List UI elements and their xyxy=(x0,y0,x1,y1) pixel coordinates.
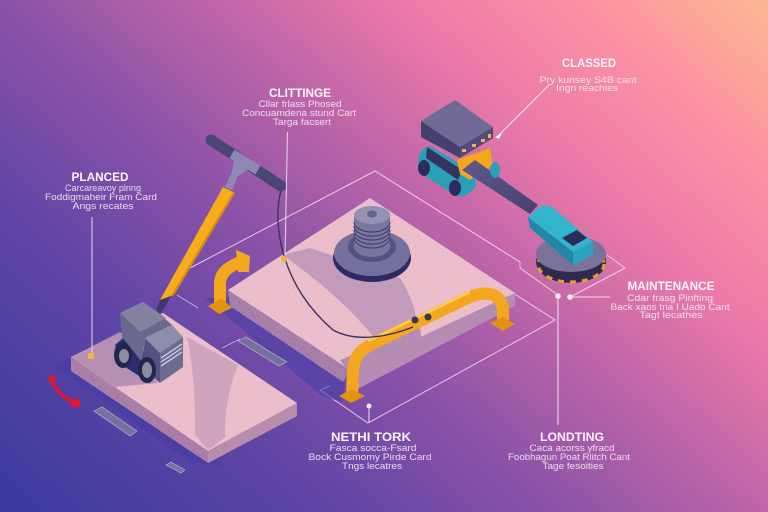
icon: flanged spool xyxy=(333,206,411,282)
icon: floor plates xyxy=(94,295,287,473)
callout: Classed: CLASSED xyxy=(562,56,616,70)
icon: left yellow pipe xyxy=(208,250,250,314)
callout: Maintenance: Tagt lecathes xyxy=(640,310,703,321)
panel: floor shadows xyxy=(55,298,345,466)
callout: Classed: Pry kunsey S4B cant xyxy=(540,75,637,86)
callout: Londting: Foobhagun Poat Rlitch Cant xyxy=(508,452,630,463)
callout: Londting xyxy=(508,293,630,472)
callout: Londting: LONDTING xyxy=(540,430,604,444)
icon: front yellow pipe xyxy=(339,292,515,403)
callout: Maintenance: Cdar frasg Pinfting xyxy=(627,293,713,304)
callout: Planced xyxy=(45,170,157,359)
callout: Clittinge: Cllar frlass Phosed xyxy=(258,99,342,110)
callout: Classed xyxy=(495,56,637,139)
callout: Planced: PLANCED xyxy=(72,170,129,184)
callout: Londting: Tage fesoities xyxy=(542,461,604,472)
icon: handle bar xyxy=(211,140,281,190)
callout: Maintenance: Back xaos tna I Uado Cant xyxy=(610,302,730,313)
callout: Clittinge: Targa facsert xyxy=(273,117,331,128)
callout: Planced: Foddigmaheir Fram Card xyxy=(45,192,157,203)
icon: cable xyxy=(278,190,413,337)
icon: tow tube xyxy=(462,160,538,214)
icon: teal car with server box xyxy=(418,100,538,214)
callout: Clittinge xyxy=(242,86,356,262)
callout: Clittinge: Concuamdena stund Cart xyxy=(242,108,356,119)
callout: Classed: Ingn reachies xyxy=(556,83,618,94)
connector outlines xyxy=(190,171,625,423)
callout: Londting: Caca acorss yfracd xyxy=(530,443,614,454)
icon: compact machine xyxy=(114,302,183,383)
icon: red arrow xyxy=(48,376,80,407)
callout: Nethi Tork: Bock Cusmomy Pirde Card xyxy=(308,452,432,463)
callout: Clittinge: CLITTINGE xyxy=(269,86,331,100)
callout: Maintenance: MAINTENANCE xyxy=(628,279,714,293)
callout: Maintenance xyxy=(567,279,730,321)
icon: teal grinder head xyxy=(528,205,606,283)
callout: Nethi Tork: Fasca socca-Fsard xyxy=(330,443,416,454)
icon: yellow arm xyxy=(153,187,235,318)
panel: upper slab xyxy=(228,198,515,392)
callout: Nethi Tork xyxy=(308,404,432,472)
callout: Planced: Carcareavoy plnng xyxy=(65,183,141,194)
callout: Planced: Angs recates xyxy=(72,201,134,212)
panel: lower-left slab xyxy=(71,313,297,463)
callout: Nethi Tork: NETHI TORK xyxy=(331,430,411,444)
callout: Nethi Tork: Tngs lecatres xyxy=(342,461,402,472)
